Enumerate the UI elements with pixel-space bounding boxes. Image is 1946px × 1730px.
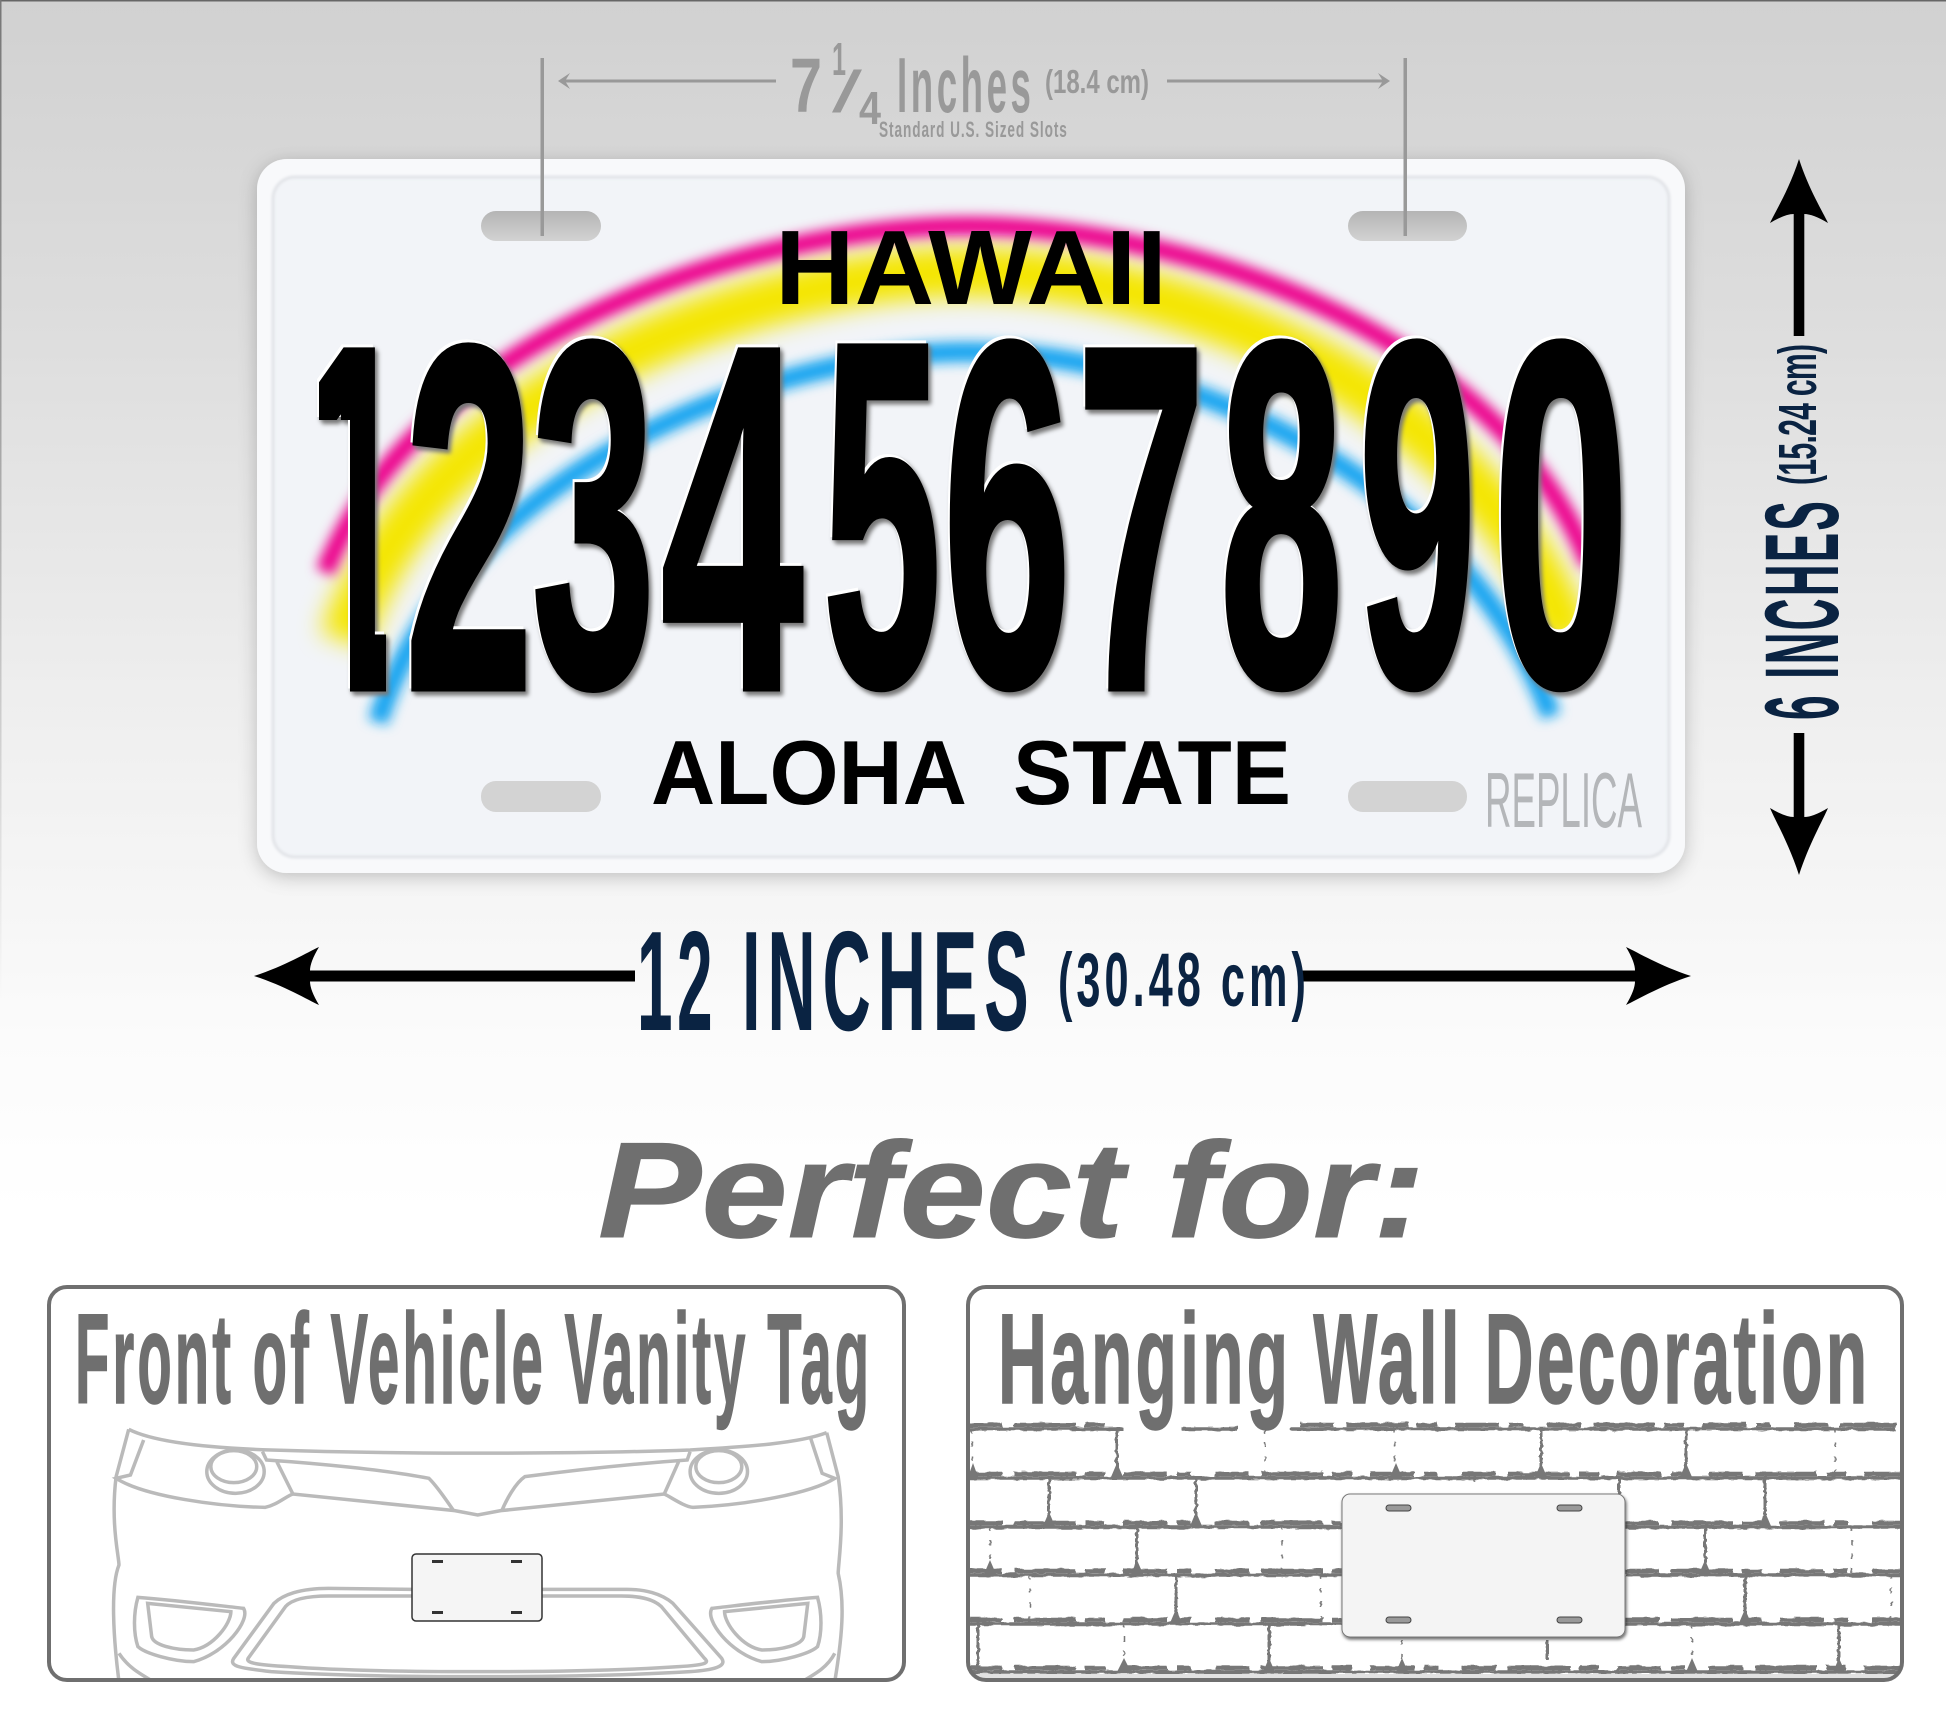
slot spacing label: 7 [790,43,822,129]
slot spacing label: 4 [859,82,881,134]
license plate: 0 [1493,240,1629,788]
plate number: 3 [532,240,655,788]
width label: (30.48 cm) [1058,938,1306,1023]
mini plate on car [412,1554,542,1621]
slot spacing label: 1 [832,33,846,85]
heading: perfect for: Perfect for: [598,1114,1425,1266]
panel: front of vehicle vanity tag [49,1286,904,1682]
illustration: brick wall [968,1425,1903,1681]
height label: 6 INCHES [1744,501,1861,720]
state slogan: ALOHA STATE [651,723,1291,824]
plate number: 6 [943,240,1071,788]
arrow: width left [254,947,635,1005]
icon: car front outline [114,1429,842,1682]
plate number: 1 [290,244,415,792]
plate number: 9 [1359,240,1476,788]
slot spacing label: (18.4 cm) [1045,63,1149,100]
arrow: left slot pointer [558,73,776,89]
panel title: Front of Vehicle Vanity Tag [75,1286,869,1430]
height label [1744,344,1861,720]
license plate [257,159,1685,873]
state name: HAWAII [775,209,1167,327]
panel title: Hanging Wall Decoration [998,1287,1867,1430]
slot spacing label: Inches [897,42,1031,129]
width dimension arrow [254,947,1691,1005]
rainbow arc [325,226,1590,722]
plate number: 4 [661,244,805,792]
arrow: height up [1770,159,1828,336]
slot spacing label [790,33,1149,142]
plate number [317,335,1627,700]
width label [637,902,1306,1061]
plate number: 8 [1220,240,1343,788]
license plate: REPLICA [1485,756,1642,844]
plate number: 5 [823,240,941,788]
slot spacing dimension [540,33,1407,236]
plate number: 2 [405,244,533,792]
plate number: 7 [1077,244,1205,792]
arrow: width right [1302,947,1691,1005]
mini plate on wall [1342,1494,1625,1637]
height dimension arrow [1770,159,1828,875]
mounting slots [481,211,1467,812]
width label: 12 [637,902,713,1061]
arrow: right slot pointer [1167,73,1390,89]
width label: INCHES [742,902,1029,1061]
height label: (15.24 cm) [1768,344,1828,485]
slot spacing label: / [832,60,864,125]
panel: hanging wall decoration [968,1287,1903,1681]
arrow: height down [1770,733,1828,875]
slot spacing label: Standard U.S. Sized Slots [879,117,1067,142]
